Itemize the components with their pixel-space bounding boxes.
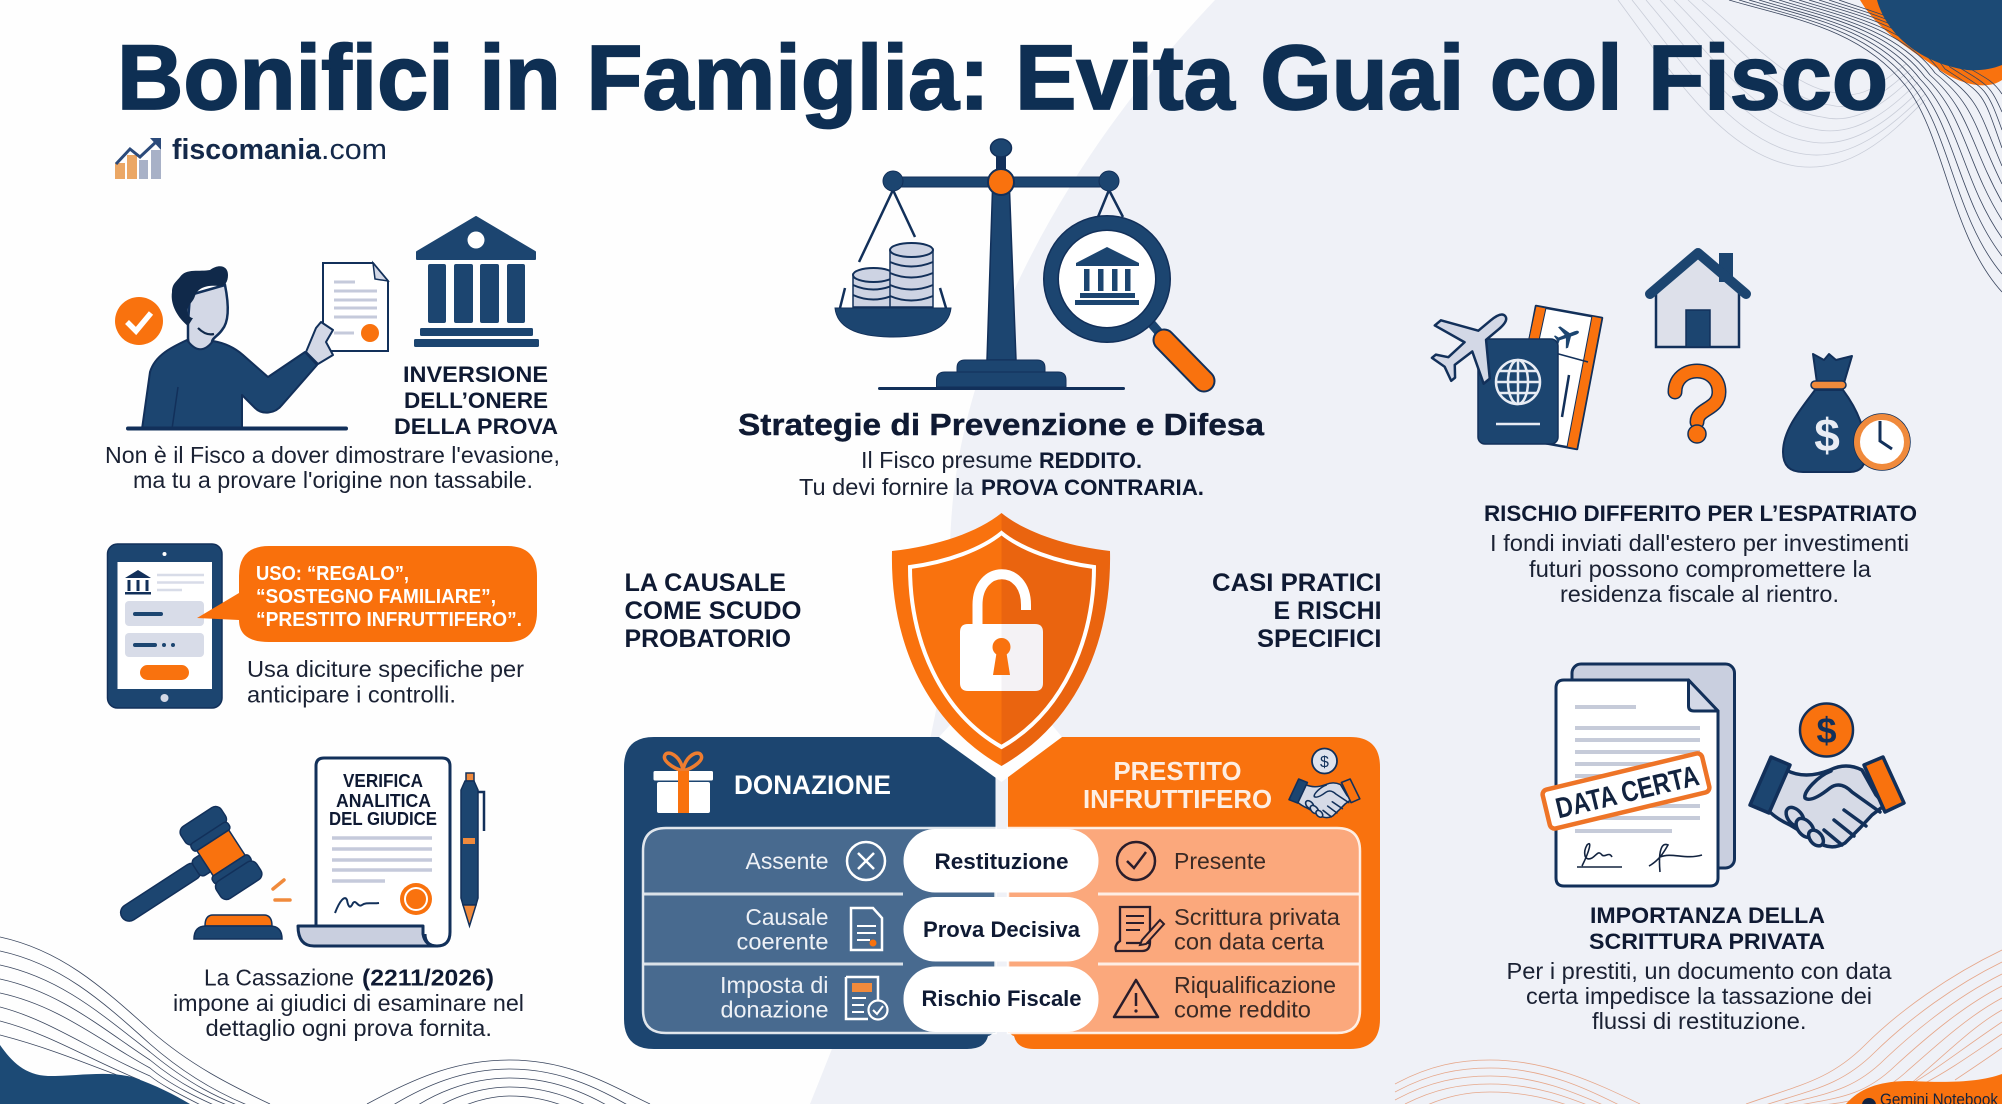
icon: money bag with clock: $	[1814, 409, 1840, 461]
icon: coin and handshake: $	[1816, 710, 1837, 751]
heading: casi pratici: CASI PRATICI	[1212, 569, 1382, 597]
text block	[799, 447, 1204, 500]
text block: ma tu a provare l'origine non tassabile.	[133, 467, 533, 493]
row: rischio right	[1114, 972, 1336, 1022]
row: rischio right: come reddito	[1174, 996, 1311, 1022]
row: restituzione right: Presente	[1174, 848, 1266, 874]
heading: Strategie di Prevenzione e Difesa	[738, 407, 1265, 442]
icon: chart arrow	[115, 138, 161, 179]
icon: pen	[461, 773, 484, 926]
text block: Usa diciture specifiche per	[247, 656, 524, 682]
heading: casi pratici: E RISCHI	[1274, 597, 1382, 625]
heading: INVERSIONE	[403, 362, 548, 387]
icon: document: VERIFICA	[343, 771, 423, 791]
icon: coin and handshake: $	[1320, 754, 1329, 771]
footer badge: Gemini Notebook	[1846, 1074, 2002, 1104]
pill: rischio fiscale	[904, 966, 1098, 1032]
text block: Tu devi fornire la	[799, 474, 974, 500]
icon: shield with padlock	[892, 513, 1110, 782]
logo: fiscomania.com: .com	[321, 134, 387, 166]
heading: DELLA PROVA	[394, 414, 558, 439]
text block: Per i prestiti, un documento con data	[1506, 958, 1892, 984]
heading	[394, 362, 558, 439]
pill: restituzione: Restituzione	[934, 849, 1068, 874]
row: imposta left: donazione	[720, 996, 828, 1022]
text block: flussi di restituzione.	[1592, 1008, 1806, 1034]
icon: document: DEL GIUDICE	[329, 809, 437, 829]
text block: dettaglio ogni prova fornita.	[206, 1015, 492, 1041]
text block: residenza fiscale al rientro.	[1560, 581, 1839, 607]
heading: casi pratici	[1212, 569, 1382, 653]
panel: donazione: DONAZIONE	[734, 770, 891, 800]
heading: la causale: COME SCUDO	[624, 597, 802, 625]
heading: la causale	[624, 569, 802, 653]
text block: impone ai giudici di esaminare nel	[173, 990, 524, 1016]
icon: documents with stamp: DATA CERTA	[1553, 760, 1702, 825]
text block	[1490, 530, 1909, 607]
callout: causali: USO: “REGALO”,	[256, 563, 409, 585]
icon: gift	[654, 753, 713, 813]
pill: prova decisiva	[904, 897, 1098, 962]
heading: casi pratici: SPECIFICI	[1257, 625, 1382, 653]
panel: donazione	[624, 737, 996, 1049]
text block	[105, 442, 560, 493]
icon: gavel	[99, 804, 290, 953]
row: rischio right: Riqualificazione	[1174, 972, 1336, 998]
row: prova right: Scrittura privata	[1174, 904, 1340, 930]
icon: passport, ticket and plane	[1417, 287, 1602, 449]
title: Bonifici in Famiglia: Evita Guai col Fisco	[117, 27, 1888, 129]
panel: inversione dell'onere	[105, 217, 560, 493]
callout: causali: “SOSTEGNO FAMILIARE”,	[256, 586, 496, 608]
panel: rischio differito	[1417, 253, 1917, 607]
text block: (2211/2026)	[362, 964, 494, 990]
row: restituzione right	[1117, 842, 1266, 880]
row: restituzione left	[746, 842, 885, 880]
text block: anticipare i controlli.	[247, 682, 456, 708]
logo: fiscomania.com: fiscomania	[172, 134, 322, 166]
row: prova left: coerente	[736, 928, 828, 954]
icon: documents with stamp	[1542, 664, 1734, 886]
callout: causali	[197, 546, 537, 642]
icon: money bag with clock	[1783, 354, 1910, 472]
panel: prestito: INFRUTTIFERO	[1083, 784, 1272, 814]
text block: Non è il Fisco a dover dimostrare l'evasione,	[105, 442, 560, 468]
icon: coin and handshake	[1750, 704, 1904, 849]
icon: tablet	[108, 544, 222, 708]
heading: la causale: LA CAUSALE	[624, 569, 786, 597]
heading: SCRITTURA PRIVATA	[1589, 929, 1825, 954]
panel: cassazione	[99, 758, 524, 1041]
heading: DELL’ONERE	[404, 388, 548, 413]
text block: certa impedisce la tassazione dei	[1526, 983, 1872, 1009]
text block: La Cassazione	[204, 964, 354, 990]
heading: la causale: PROBATORIO	[624, 625, 791, 653]
text block: futuri possono compromettere la	[1529, 556, 1871, 582]
icon: coin and handshake	[1289, 748, 1360, 818]
heading: IMPORTANZA DELLA	[1590, 903, 1825, 928]
row: prova left: Causale	[746, 904, 828, 930]
row: imposta left	[720, 972, 888, 1022]
text block	[247, 656, 524, 708]
row: prova right	[1116, 904, 1340, 954]
icon: document: ANALITICA	[336, 791, 431, 811]
text block	[1506, 958, 1892, 1034]
pill: restituzione	[904, 829, 1098, 892]
heading: RISCHIO DIFFERITO PER L’ESPATRIATO	[1484, 501, 1917, 526]
row: prova left	[736, 904, 882, 954]
logo: fiscomania.com	[115, 134, 387, 179]
row: imposta left: Imposta di	[720, 972, 828, 998]
icon: house	[1650, 253, 1746, 347]
icon: person with document	[115, 263, 388, 430]
text block: I fondi inviati dall'estero per investimenti	[1490, 530, 1909, 556]
text block: PROVA CONTRARIA.	[981, 475, 1204, 500]
panel: prestito	[1008, 737, 1380, 1049]
callout: causali: “PRESTITO INFRUTTIFERO”.	[256, 609, 522, 631]
text block: Il Fisco presume	[861, 447, 1032, 473]
icon: question mark	[1675, 371, 1719, 443]
icon: document	[298, 758, 450, 946]
row: restituzione left: Assente	[746, 848, 828, 874]
heading	[1589, 903, 1825, 954]
text block: REDDITO.	[1039, 448, 1142, 473]
panel: scrittura privata	[1506, 664, 1904, 1034]
icon: scale with magnifier	[835, 139, 1204, 390]
panel: prestito: PRESTITO	[1114, 756, 1242, 786]
panel: causale	[108, 544, 537, 708]
pill: rischio fiscale: Rischio Fiscale	[922, 986, 1082, 1011]
icon: bank	[414, 217, 539, 347]
panel: strategie	[738, 139, 1265, 500]
row: prova right: con data certa	[1174, 928, 1324, 954]
text block	[173, 964, 524, 1041]
pill: prova decisiva: Prova Decisiva	[923, 917, 1081, 942]
comparison table	[624, 737, 1380, 1049]
